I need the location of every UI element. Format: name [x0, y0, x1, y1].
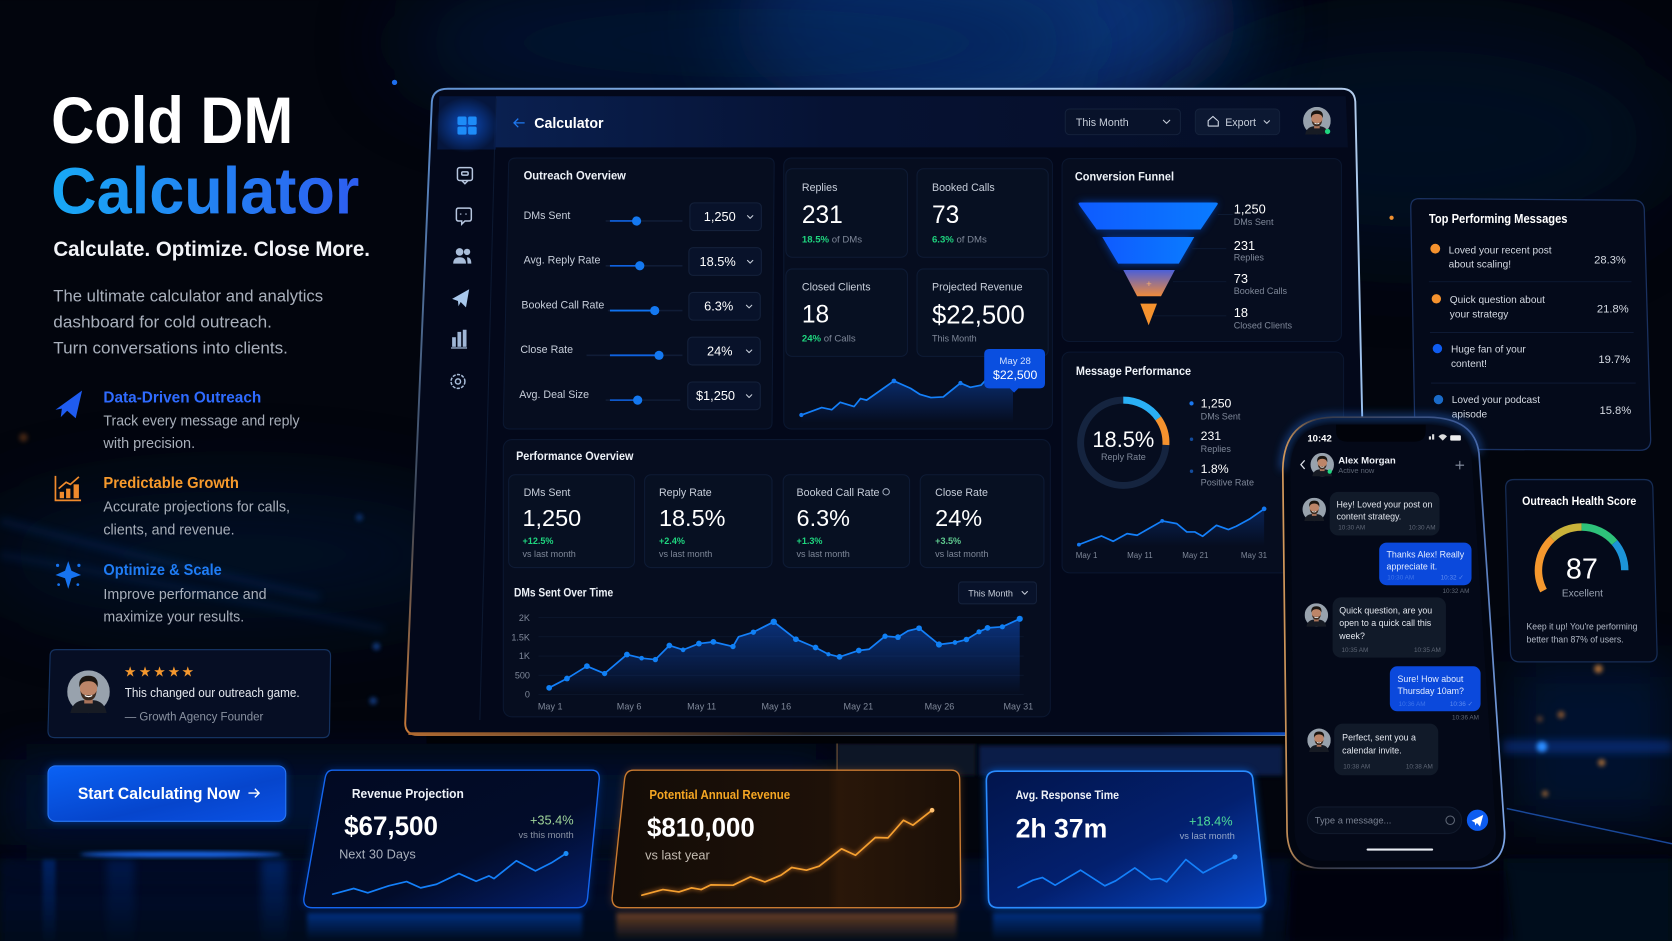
phone status bar: 10:42 — [1307, 434, 1332, 445]
chat: outgoing 1: 10:32 ✓ — [1441, 575, 1464, 582]
message input: Type a message... — [1315, 815, 1391, 825]
chart: message trend: May 21 — [1182, 551, 1209, 560]
row: deal size — [519, 382, 760, 410]
chart: DMs sent over time — [511, 613, 1033, 711]
stat: reply rate: +2.4% — [659, 536, 685, 546]
tooltip: May 28: May 28 — [999, 356, 1031, 367]
icon: paper plane — [55, 391, 82, 418]
card: booked calls — [917, 169, 1048, 257]
tooltip: May 28 — [984, 349, 1045, 393]
icon: chat bubble — [456, 208, 471, 224]
icon: sparkle — [55, 561, 81, 589]
message row 1: 28.3% — [1594, 255, 1626, 267]
feature: predictable growth — [55, 475, 290, 538]
chart: DMs sent over time: May 26 — [925, 701, 954, 711]
chat: incoming 1: 10:30 AM — [1409, 525, 1436, 532]
card: projected revenue: This Month — [932, 333, 977, 343]
chat: outgoing 1: 10:32 AM — [1442, 588, 1469, 595]
chart: projected revenue trend — [799, 370, 1013, 423]
stars: ★ — [181, 663, 194, 679]
chart: message trend: May 31 — [1241, 551, 1268, 560]
panel: message performance: Message Performance — [1076, 365, 1192, 378]
chart: DMs sent over time: May 21 — [844, 701, 873, 711]
chart: DMs sent over time: 0 — [525, 690, 530, 700]
funnel labels: DMs Sent — [1234, 217, 1274, 227]
card: replies: 18.5% of DMs — [802, 234, 862, 245]
message row 2: Quick question about — [1450, 295, 1545, 306]
dropdown: chart range — [959, 582, 1036, 604]
testimonial — [48, 650, 331, 738]
message row 2 — [1432, 294, 1629, 321]
phone notch — [1336, 425, 1426, 442]
card: potential annual revenue: $810,000 — [647, 812, 755, 842]
card: booked calls: 73 — [932, 202, 959, 229]
panel: top performing messages — [1411, 199, 1651, 450]
stars: ★ — [153, 663, 166, 679]
card: revenue projection: $67,500 — [344, 811, 438, 841]
icon: message square — [457, 168, 472, 184]
chat: incoming 2: open to a quick call this — [1339, 618, 1432, 628]
legend: message metrics: Positive Rate — [1201, 477, 1254, 487]
message row 3 — [1433, 344, 1630, 370]
card: revenue projection: Next 30 Days — [339, 847, 416, 862]
stat: booked call rate — [783, 475, 910, 568]
feature: predictable growth: Predictable Growth — [103, 475, 239, 492]
feature: optimize and scale — [55, 561, 267, 625]
chart: response time trend — [1018, 854, 1237, 888]
title: Calculator — [51, 155, 359, 229]
stars — [124, 663, 194, 679]
chat: incoming 3: 10:38 AM — [1343, 764, 1370, 771]
message row 4: Loved your podcast — [1452, 395, 1540, 406]
message row 3: 19.7% — [1598, 354, 1630, 366]
legend: message metrics — [1189, 397, 1254, 487]
card: average response time: 2h 37m — [1016, 813, 1107, 843]
chat: incoming 2 — [1305, 597, 1446, 658]
home indicator — [1367, 849, 1433, 851]
chart: DMs sent over time: May 31 — [1004, 701, 1033, 711]
sidebar — [434, 96, 498, 388]
dropdown: this month — [1065, 109, 1180, 135]
feature: optimize and scale: Optimize & Scale — [103, 562, 222, 579]
panel: outreach overview — [503, 158, 774, 429]
chart: funnel — [1078, 203, 1218, 325]
chart: message trend: May 11 — [1127, 551, 1153, 560]
panel: outreach overview: Outreach Overview — [524, 169, 627, 182]
chat: incoming 3 — [1307, 724, 1438, 775]
chart: DMs sent over time: May 11 — [687, 701, 716, 711]
title: Cold DM — [51, 84, 293, 158]
stat: close rate: +3.5% — [935, 536, 961, 546]
button: export: Export — [1225, 117, 1256, 129]
message row 4 — [1434, 395, 1631, 421]
button: start calculating — [48, 766, 286, 821]
card: replies — [786, 169, 907, 257]
card: projected revenue — [917, 269, 1048, 356]
chat: incoming 1: content strategy. — [1337, 512, 1401, 522]
stat: booked call rate: vs last month — [797, 549, 850, 559]
panel: performance overview: DMs Sent Over Time — [514, 586, 614, 599]
panel: outreach health score: Excellent — [1562, 588, 1603, 599]
chart: DMs sent over time: May 1 — [538, 701, 563, 711]
message row 1: Loved your recent post — [1449, 246, 1552, 257]
card: potential annual revenue — [612, 770, 961, 941]
chart: revenue projection trend — [333, 851, 569, 894]
message row 2: 21.8% — [1597, 304, 1629, 316]
row: close rate: 24% — [707, 343, 733, 358]
feature: optimize and scale: maximize your results. — [103, 609, 244, 625]
chat: outgoing 2: Thursday 10am? — [1398, 686, 1464, 696]
tagline: Calculate. Optimize. Close More. — [53, 237, 370, 261]
stat: DMs sent: DMs Sent — [524, 487, 570, 499]
card: replies: Replies — [802, 182, 837, 194]
chart: message trend — [1076, 507, 1268, 560]
legend: message metrics: 231 — [1201, 429, 1221, 443]
chat: incoming 1 — [1303, 492, 1440, 536]
message row 2: your strategy — [1450, 310, 1509, 321]
message row 3: content! — [1451, 359, 1487, 370]
feature: predictable growth: clients, and revenue. — [103, 522, 235, 538]
card: average response time — [986, 771, 1266, 941]
panel: performance overview: Performance Overview — [516, 450, 634, 463]
chat: incoming 1: Hey! Loved your post on — [1337, 500, 1432, 510]
phone status bar — [1307, 434, 1461, 445]
message row 1: about scaling! — [1449, 260, 1511, 271]
chat: incoming 2: 10:35 AM — [1341, 647, 1368, 654]
panel: KPI group — [784, 158, 1052, 429]
stat: close rate: Close Rate — [935, 487, 988, 499]
stat: reply rate — [645, 475, 772, 568]
chart: DMs sent over time: 1K — [519, 651, 530, 661]
chat: outgoing 1: Thanks Alex! Really — [1387, 550, 1465, 560]
message row 3: Huge fan of your — [1451, 345, 1526, 356]
chart: message trend: May 1 — [1076, 551, 1098, 560]
icon: dashboard grid — [457, 116, 477, 135]
card: revenue projection — [304, 770, 599, 941]
stat: reply rate: 18.5% — [659, 505, 725, 531]
funnel labels: Replies — [1234, 252, 1264, 262]
message row 1 — [1430, 244, 1626, 271]
card: booked calls: Booked Calls — [932, 182, 995, 194]
stat: booked call rate: Booked Call Rate — [797, 487, 880, 499]
chart: DMs sent over time: 1.5K — [511, 633, 530, 643]
row: DMs sent: 1,250 — [704, 209, 736, 224]
chat: incoming 2: Quick question, are you — [1339, 605, 1432, 615]
dropdown: this month: This Month — [1076, 117, 1129, 129]
dropdown: chart range: This Month — [968, 588, 1013, 598]
stat: booked call rate: +1.3% — [797, 536, 822, 546]
row: DMs sent: DMs Sent — [524, 210, 570, 222]
card: closed clients: 18 — [802, 301, 829, 328]
card: average response time: +18.4% — [1189, 814, 1233, 829]
phone header: contact — [1301, 453, 1464, 476]
title — [51, 84, 359, 229]
chart: reply rate donut: Reply Rate — [1101, 452, 1146, 462]
card: replies: 231 — [802, 202, 843, 229]
panel: outreach health score: Outreach Health Score — [1522, 494, 1636, 508]
stars: ★ — [124, 663, 136, 679]
funnel labels: 18 — [1234, 305, 1248, 320]
stat: DMs sent: vs last month — [523, 549, 576, 559]
chat: outgoing 1 — [1379, 543, 1472, 595]
card: potential annual revenue: Potential Annual Revenue — [649, 787, 790, 802]
chart: annual revenue trend — [642, 808, 934, 895]
panel: outreach health score: 87 — [1566, 554, 1598, 586]
card: closed clients — [786, 269, 907, 356]
row: booked call rate — [521, 292, 760, 320]
row: close rate — [520, 337, 760, 365]
chat: outgoing 1: 10:30 AM — [1387, 575, 1414, 582]
chat: outgoing 2: 10:36 AM — [1452, 715, 1479, 722]
card: closed clients: Closed Clients — [802, 281, 871, 293]
chart: DMs sent over time: 500 — [515, 670, 530, 680]
tooltip: May 28: $22,500 — [993, 368, 1037, 382]
feature: data-driven outreach: with precision. — [102, 436, 195, 452]
chat: incoming 1: 10:30 AM — [1338, 525, 1365, 532]
chat: incoming 3: Perfect, sent you a — [1342, 732, 1416, 742]
funnel labels: 1,250 — [1234, 202, 1266, 217]
stat: booked call rate: 6.3% — [797, 505, 850, 531]
row: deal size: $1,250 — [696, 388, 735, 403]
chart: health gauge — [1538, 527, 1625, 591]
chart: reply rate donut: 18.5% — [1092, 427, 1154, 452]
funnel labels: Booked Calls — [1234, 286, 1288, 296]
row: reply rate: Avg. Reply Rate — [524, 255, 600, 267]
stars: ★ — [168, 663, 180, 679]
send button — [1467, 810, 1488, 831]
icon: gear — [451, 375, 465, 388]
row: close rate: Close Rate — [520, 344, 573, 356]
phone header: contact: Active now — [1338, 466, 1375, 475]
description: The ultimate calculator and analytics — [53, 286, 323, 305]
icon: bars — [451, 330, 467, 349]
avatar: founder — [67, 670, 110, 713]
chat: outgoing 2: 10:36 ✓ — [1450, 701, 1473, 708]
dashboard header band — [494, 96, 1348, 147]
panel: performance overview — [503, 440, 1050, 717]
card: potential annual revenue: vs last year — [645, 848, 711, 863]
stat: reply rate: Reply Rate — [659, 487, 712, 499]
funnel labels: 73 — [1234, 271, 1248, 286]
button: start calculating: Start Calculating Now — [78, 784, 240, 803]
description: dashboard for cold outreach. — [53, 313, 272, 332]
feature: optimize and scale: Improve performance and — [103, 587, 267, 603]
chart: funnel: + — [1146, 279, 1152, 290]
chart: reply rate donut — [1081, 400, 1166, 485]
message input — [1307, 807, 1462, 834]
chart: DMs sent over time: May 6 — [617, 701, 641, 711]
message row 4: apisode — [1452, 410, 1488, 421]
row: booked call rate: Booked Call Rate — [521, 299, 604, 311]
chat: incoming 2: week? — [1338, 631, 1365, 641]
legend: message metrics: DMs Sent — [1201, 411, 1241, 421]
chart: DMs sent over time: 2K — [519, 613, 530, 623]
avatar: user — [1303, 107, 1331, 135]
card: revenue projection: Revenue Projection — [352, 786, 464, 801]
chart: DMs sent over time: May 16 — [761, 701, 791, 711]
message row 4: 15.8% — [1599, 405, 1631, 417]
phone — [1283, 417, 1514, 941]
panel: message performance — [1062, 352, 1344, 573]
description — [53, 286, 323, 358]
description: Turn conversations into clients. — [53, 339, 288, 358]
chat: outgoing 1: appreciate it. — [1387, 562, 1437, 572]
card: projected revenue: Projected Revenue — [932, 281, 1023, 293]
row: reply rate: 18.5% — [700, 254, 736, 269]
card: average response time: vs last month — [1180, 831, 1235, 841]
panel: top performing messages: Top Performing Messages — [1429, 211, 1568, 226]
stat: reply rate: vs last month — [659, 549, 712, 559]
icon: users — [453, 248, 471, 264]
row: DMs sent — [524, 203, 761, 231]
feature: data-driven outreach: Data-Driven Outreach — [103, 389, 261, 406]
stat: close rate: 24% — [935, 505, 982, 531]
icon: growth chart — [55, 476, 81, 500]
phone header: contact: Alex Morgan — [1338, 456, 1396, 467]
row: reply rate — [524, 248, 761, 275]
card: projected revenue: $22,500 — [932, 301, 1025, 329]
card: average response time: Avg. Response Time — [1016, 788, 1119, 802]
floor and wash — [0, 859, 1290, 941]
card: revenue projection: vs this month — [518, 830, 574, 840]
stat: DMs sent: 1,250 — [523, 505, 581, 531]
panel: outreach health score — [1506, 480, 1657, 662]
stat: DMs sent: +12.5% — [523, 536, 553, 546]
legend: message metrics: 1,250 — [1201, 397, 1232, 411]
stars: ★ — [139, 663, 151, 679]
icon: send — [452, 289, 469, 307]
chat: outgoing 2 — [1390, 666, 1481, 722]
card: revenue projection: +35.4% — [530, 813, 574, 828]
panel: outreach health score: better than 87% of users. — [1527, 635, 1624, 645]
legend: message metrics: 1.8% — [1201, 462, 1229, 476]
chat: outgoing 2: 10:36 AM — [1399, 701, 1426, 708]
button: export — [1195, 109, 1280, 135]
panel: outreach health score: Keep it up! You're performing — [1527, 622, 1637, 632]
stat: DMs sent — [509, 475, 634, 568]
legend: message metrics: Replies — [1201, 444, 1231, 454]
funnel labels: 231 — [1234, 238, 1255, 253]
feature: data-driven outreach — [55, 389, 300, 452]
row: booked call rate: 6.3% — [704, 299, 733, 314]
funnel labels: Closed Clients — [1234, 321, 1293, 331]
chat: incoming 3: calendar invite. — [1342, 746, 1402, 756]
panel: conversion funnel — [1062, 159, 1341, 341]
card: closed clients: 24% of Calls — [802, 333, 856, 344]
monitor stand — [836, 743, 838, 772]
monitor — [405, 89, 1369, 743]
testimonial: This changed our outreach game. — [125, 685, 300, 700]
chat: outgoing 2: Sure! How about — [1398, 674, 1464, 684]
row: deal size: Avg. Deal Size — [519, 389, 589, 401]
feature: data-driven outreach: Track every message and reply — [103, 414, 300, 430]
stat: close rate — [920, 475, 1044, 568]
feature: predictable growth: Accurate projections for calls, — [103, 500, 290, 516]
panel: conversion funnel: Conversion Funnel — [1075, 170, 1174, 183]
card: booked calls: 6.3% of DMs — [932, 234, 987, 245]
header: back and title: Calculator — [534, 115, 604, 132]
funnel labels — [1154, 202, 1293, 331]
stat: close rate: vs last month — [935, 549, 988, 559]
chat: incoming 2: 10:35 AM — [1414, 647, 1441, 654]
testimonial: — Growth Agency Founder — [125, 711, 263, 724]
chat: incoming 3: 10:38 AM — [1406, 764, 1433, 771]
